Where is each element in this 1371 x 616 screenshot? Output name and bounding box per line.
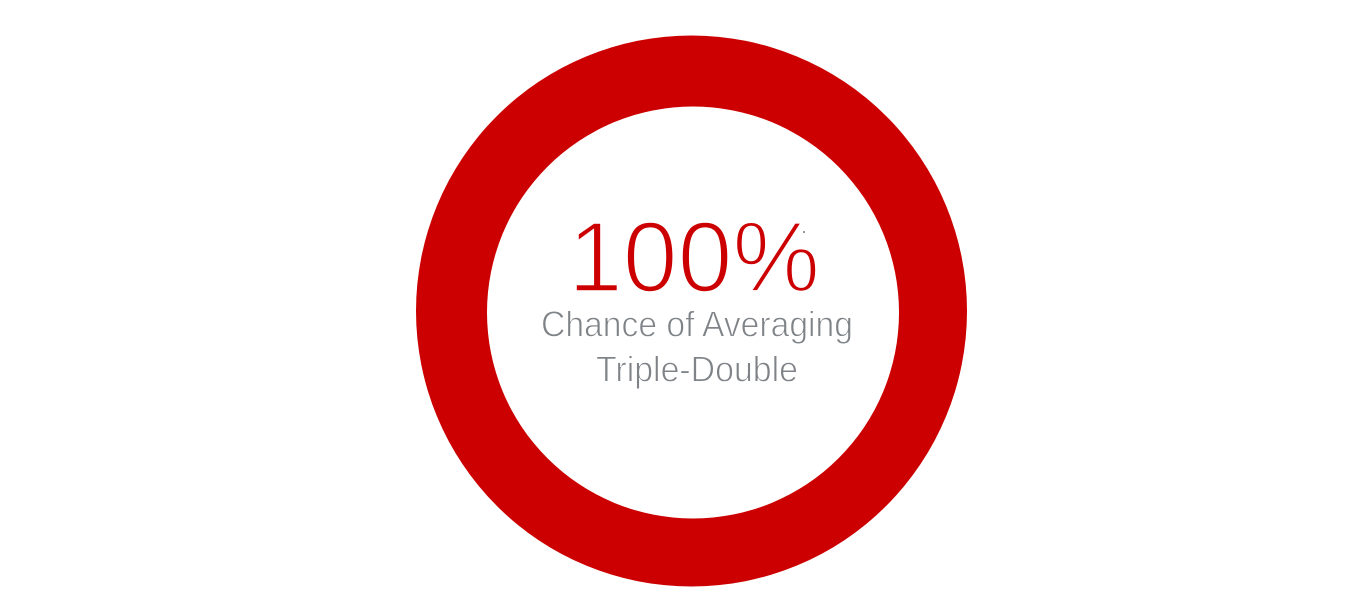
donut chart: 100% ring: [416, 36, 967, 586]
big value: 100%: 100%: [568, 202, 820, 314]
caption line 1: Chance of Averaging: [541, 304, 853, 344]
caption: chance of averaging triple-double: [541, 304, 853, 390]
small dot artifact: [803, 231, 805, 233]
caption line 2: Triple-Double: [596, 348, 798, 390]
